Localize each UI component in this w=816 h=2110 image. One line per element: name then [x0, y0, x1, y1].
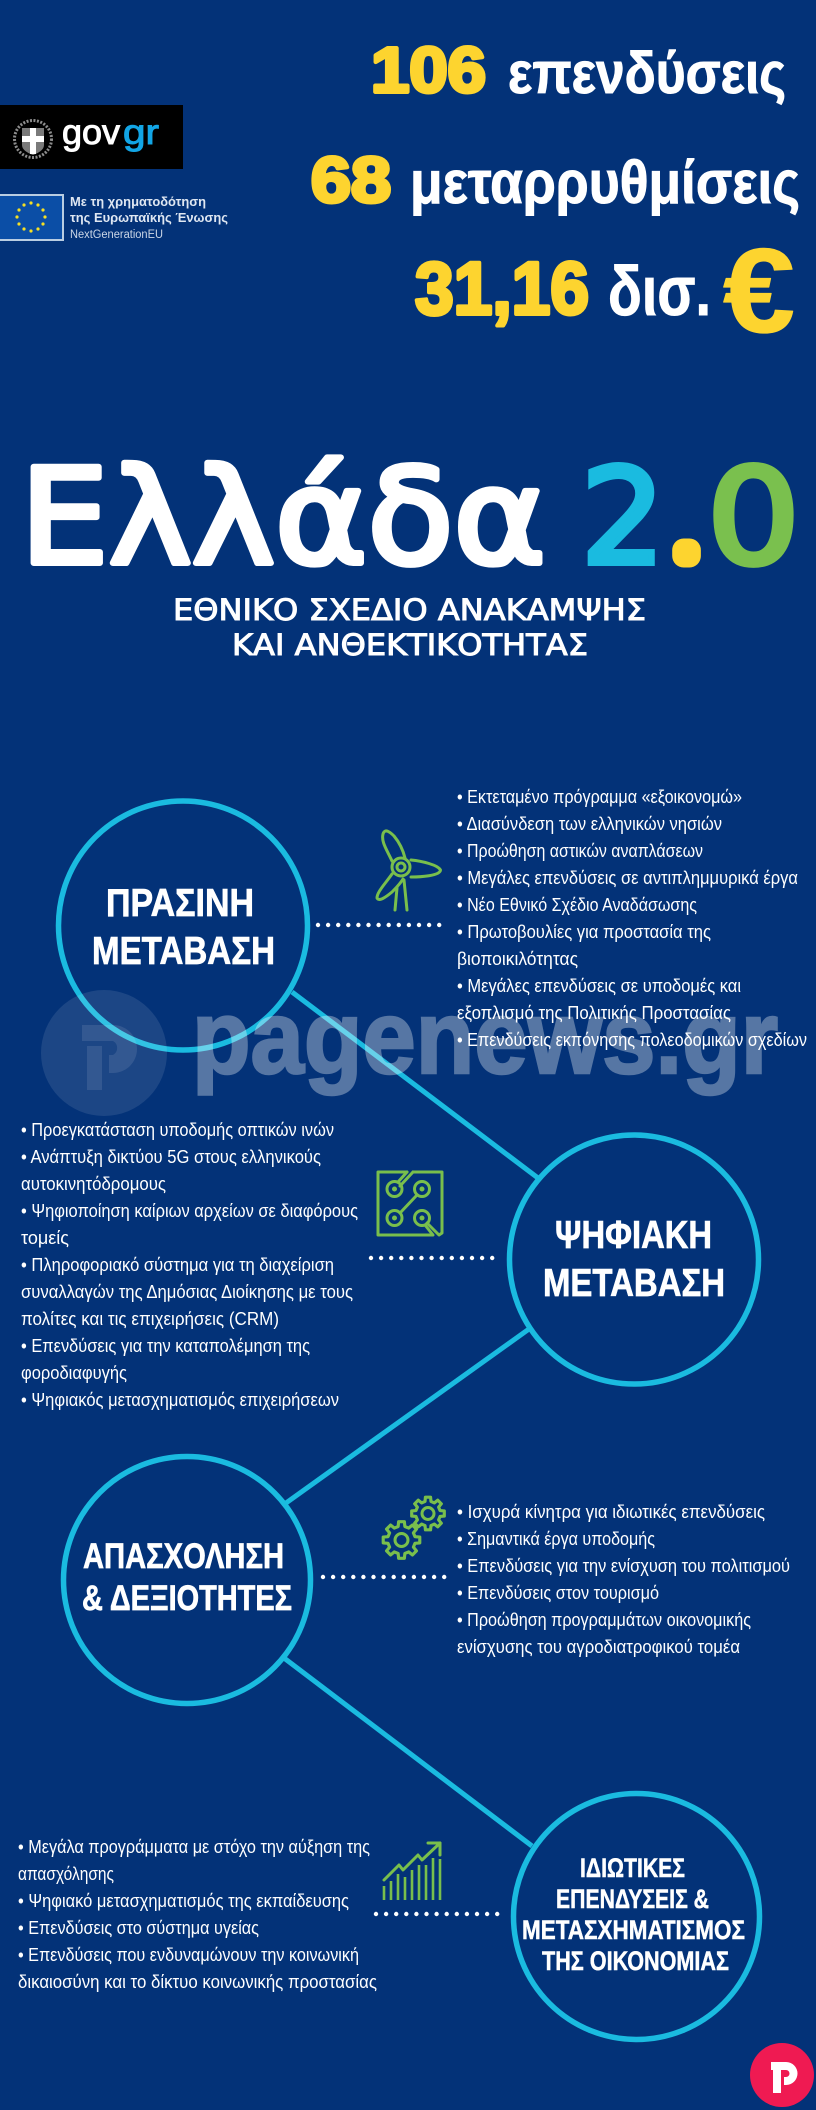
bullet list: • Νέο Εθνικό Σχέδιο Αναδάσωσης — [457, 895, 697, 915]
icon: growth chart — [384, 1843, 440, 1900]
bullet list: ενίσχυσης του αγροδιατροφικού τομέα — [457, 1637, 740, 1657]
stat: 106 investments: 106 — [371, 34, 486, 106]
heading: & ΔΕΞΙΟΤΗΤΕΣ — [82, 1579, 292, 1618]
heading: ΜΕΤΑΣΧΗΜΑΤΙΣΜΟΣ — [522, 1915, 745, 1945]
logo: gov.gr: gr — [123, 113, 159, 152]
bullet list: • Ψηφιοποίηση καίριων αρχείων σε διαφόρους — [21, 1201, 358, 1221]
heading — [82, 1537, 292, 1618]
subtitle: ΕΘΝΙΚΟ ΣΧΕΔΙΟ ΑΝΑΚΑΜΨΗΣ — [173, 593, 646, 627]
bullet list: • Σημαντικά έργα υποδομής — [457, 1529, 655, 1549]
bullet list: • Μεγάλα προγράμματα με στόχο την αύξηση της — [18, 1837, 370, 1857]
stat: 31,16 billion euro — [415, 224, 795, 358]
heading: ΠΡΑΣΙΝΗ — [106, 882, 254, 925]
heading — [543, 1214, 725, 1305]
bullet list: • Επενδύσεις για την καταπολέμηση της — [21, 1336, 310, 1356]
bullet list: πολίτες και τις επιχειρήσεις (CRM) — [21, 1309, 279, 1329]
title: Ελλάδα 2.0: 0 — [707, 441, 800, 595]
heading — [522, 1853, 745, 1976]
bullet list: • Επενδύσεις στον τουρισμό — [457, 1583, 659, 1603]
bullet list: φοροδιαφυγής — [21, 1363, 127, 1383]
bullet list: • Ψηφιακό μετασχηματισμός της εκπαίδευσης — [18, 1891, 349, 1911]
stat: 31,16 billion euro: € — [723, 224, 795, 358]
bullet list: • Εκτεταμένο πρόγραμμα «εξοικονομώ» — [457, 787, 742, 807]
bullet list: βιοποικιλότητας — [457, 949, 578, 969]
subtitle — [173, 593, 646, 662]
stat: 31,16 billion euro: δισ. — [608, 252, 711, 330]
stat: 106 investments: επενδύσεις — [508, 41, 786, 106]
bullet list: • Πρωτοβουλίες για προστασία της — [457, 922, 711, 942]
subtitle: ΚΑΙ ΑΝΘΕΚΤΙΚΟΤΗΤΑΣ — [232, 628, 588, 662]
panel: digital transition — [21, 1120, 758, 1410]
bullet list: • Προώθηση αστικών αναπλάσεων — [457, 841, 703, 861]
heading: ΙΔΙΩΤΙΚΕΣ — [580, 1853, 685, 1883]
heading: ΜΕΤΑΒΑΣΗ — [92, 930, 275, 973]
circle — [510, 1135, 758, 1384]
circle — [58, 801, 308, 1050]
bullet list: αυτοκινητόδρομους — [21, 1174, 166, 1194]
bullet list: • Επενδύσεις για την ενίσχυση του πολιτισμού — [457, 1556, 790, 1576]
bullet list: συναλλαγών της Δημόσιας Διοίκησης με τους — [21, 1282, 353, 1302]
heading: ΑΠΑΣΧΟΛΗΣΗ — [83, 1537, 284, 1576]
bullet list: • Ανάπτυξη δικτύου 5G στους ελληνικούς — [21, 1147, 321, 1167]
bullet list: • Προώθηση προγραμμάτων οικονομικής — [457, 1610, 751, 1630]
icon: gears — [383, 1497, 444, 1558]
watermark logo — [41, 990, 167, 1116]
logo: gov.gr — [0, 105, 183, 169]
headline stats — [311, 34, 800, 358]
title: Ελλάδα 2.0: 2 — [581, 441, 665, 595]
bullet list: • Ψηφιακός μετασχηματισμός επιχειρήσεων — [21, 1390, 339, 1410]
bullet list: • Προεγκατάσταση υποδομής οπτικών ινών — [21, 1120, 334, 1140]
funding text: NextGenerationEU — [70, 229, 163, 241]
circle — [514, 1794, 760, 2040]
connector: employment to private investments — [284, 1658, 532, 1846]
icon: EU flag — [0, 195, 63, 240]
logo: pagenews badge — [750, 2043, 814, 2107]
bullet list: εξοπλισμό της Πολιτικής Προστασίας — [457, 1003, 731, 1023]
heading: ΜΕΤΑΒΑΣΗ — [543, 1262, 725, 1305]
bullet list: • Διασύνδεση των ελληνικών νησιών — [457, 814, 722, 834]
dotted connector — [376, 1912, 498, 1916]
connector: digital to employment — [286, 1329, 529, 1503]
funding text — [70, 195, 228, 241]
dotted connector — [371, 1256, 493, 1260]
stat: 106 investments — [371, 34, 786, 106]
heading: ΨΗΦΙΑΚΗ — [555, 1214, 712, 1257]
heading: ΤΗΣ ΟΙΚΟΝΟΜΙΑΣ — [542, 1946, 729, 1976]
panel: employment and skills — [64, 1456, 790, 1704]
stat: 31,16 billion euro: 31,16 — [415, 247, 589, 330]
watermark: pagenews.gr — [41, 980, 778, 1116]
panel: green transition — [58, 787, 807, 1050]
wordmark: gov — [62, 113, 121, 152]
bullet list: • Επενδύσεις στο σύστημα υγείας — [18, 1918, 259, 1938]
funding text: της Ευρωπαϊκής Ένωσης — [70, 211, 228, 225]
connector: green to digital — [292, 992, 538, 1178]
bullet list — [21, 1120, 358, 1410]
bullet list — [457, 787, 807, 1050]
bullet list: • Επενδύσεις που ενδυναμώνουν την κοινωνική — [18, 1945, 359, 1965]
bullet list: τομείς — [21, 1228, 69, 1248]
funding text: Με τη χρηματοδότηση — [70, 195, 206, 209]
bullet list — [18, 1837, 377, 1992]
bullet list: απασχόλησης — [18, 1864, 114, 1884]
bullet list — [457, 1502, 790, 1657]
heading — [92, 882, 275, 973]
bullet list: • Πληροφοριακό σύστημα για τη διαχείριση — [21, 1255, 334, 1275]
title: Ελλάδα 2.0: . — [681, 521, 692, 565]
stat: 68 reforms: 68 — [311, 144, 391, 216]
logo: EU funding — [0, 195, 228, 241]
bullet list: • Μεγάλες επενδύσεις σε υποδομές και — [457, 976, 741, 996]
panel: private investments — [18, 1794, 760, 2040]
heading: ΕΠΕΝΔΥΣΕΙΣ & — [556, 1884, 709, 1914]
bullet list: • Ισχυρά κίνητρα για ιδιωτικές επενδύσεις — [457, 1502, 765, 1522]
dotted connector — [323, 1575, 446, 1579]
title: Ελλάδα 2.0: Ελλάδα — [20, 441, 546, 595]
circle — [64, 1456, 310, 1704]
bullet list: δικαιοσύνη και το δίκτυο κοινωνικής προστασίας — [18, 1972, 377, 1992]
icon: circuit board — [378, 1172, 442, 1235]
icon: wind turbine — [377, 831, 440, 910]
title: Ελλάδα 2.0 — [20, 441, 800, 595]
icon: greek emblem — [14, 120, 52, 158]
dotted connector — [318, 923, 440, 927]
watermark text: pagenews.gr — [192, 980, 778, 1096]
